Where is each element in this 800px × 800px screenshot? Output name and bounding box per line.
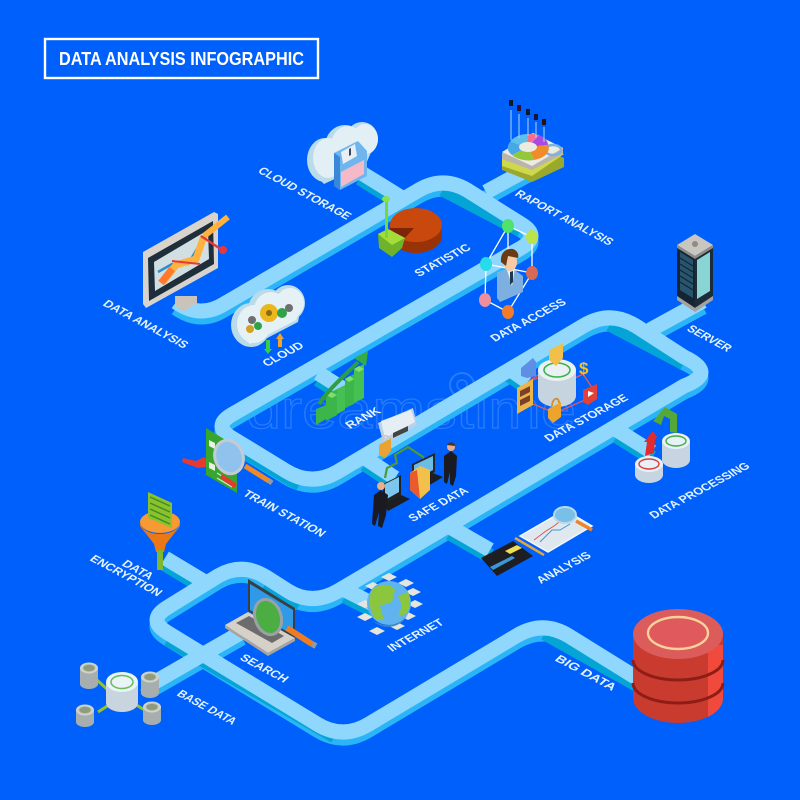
label: data (encryption first line): DATA bbox=[119, 557, 157, 582]
icon: raport analysis stack with donut chart bbox=[502, 100, 564, 182]
icon: monitor with chart bbox=[143, 212, 228, 311]
icon: cloud with gears bbox=[231, 285, 305, 354]
label: server: SERVER bbox=[684, 322, 736, 354]
title bbox=[45, 39, 318, 78]
label: data access: DATA ACCESS bbox=[487, 296, 569, 344]
icon: data access network with person bbox=[479, 219, 538, 319]
label: internet: INTERNET bbox=[384, 616, 448, 654]
label: base data: BASE DATA bbox=[174, 687, 241, 727]
label: statistic: STATISTIC bbox=[411, 241, 474, 279]
icon: cloud storage with floppy bbox=[307, 122, 378, 190]
icon: search laptop with magnifier bbox=[225, 579, 316, 656]
label: cloud: CLOUD bbox=[259, 339, 307, 369]
icon: statistic pie chart bbox=[378, 196, 442, 257]
label: train station: TRAIN STATION bbox=[240, 487, 329, 539]
icon: rank bars with arrow bbox=[316, 351, 368, 425]
label: raport analysis: RAPORT ANALYSIS bbox=[512, 187, 617, 248]
icon: base data cylinders bbox=[76, 662, 161, 727]
icon: data storage bbox=[517, 343, 597, 423]
icon: data processing bbox=[635, 407, 690, 483]
label: encryption: ENCRYPTION bbox=[87, 552, 166, 599]
icon: internet globe with chips bbox=[357, 573, 423, 635]
label: rank: RANK bbox=[342, 404, 384, 431]
title: DATA ANALYSIS INFOGRAPHIC bbox=[59, 49, 304, 69]
icon: big data cylinder bbox=[633, 609, 723, 723]
icon: safe data with guards bbox=[372, 408, 457, 528]
watermark: dreamstime bbox=[246, 380, 576, 440]
label: data processing: DATA PROCESSING bbox=[646, 460, 753, 521]
label: data analysis: DATA ANALYSIS bbox=[100, 297, 192, 351]
pipeline network bbox=[155, 168, 703, 738]
icon: data storage: $ bbox=[579, 359, 589, 378]
label: big data: BIG DATA bbox=[552, 652, 620, 693]
label: analysis: ANALYSIS bbox=[533, 549, 594, 586]
label: safe data: SAFE DATA bbox=[405, 484, 472, 524]
icon: server rack bbox=[677, 234, 713, 312]
label: data storage: DATA STORAGE bbox=[541, 392, 631, 444]
icon: train station board and magnifier bbox=[182, 428, 272, 493]
label: search: SEARCH bbox=[237, 651, 292, 685]
icon: funnel with binary block bbox=[140, 492, 180, 570]
label: cloud storage: CLOUD STORAGE bbox=[255, 164, 355, 222]
icon: analysis paper, pencil and calculator bbox=[481, 507, 592, 576]
